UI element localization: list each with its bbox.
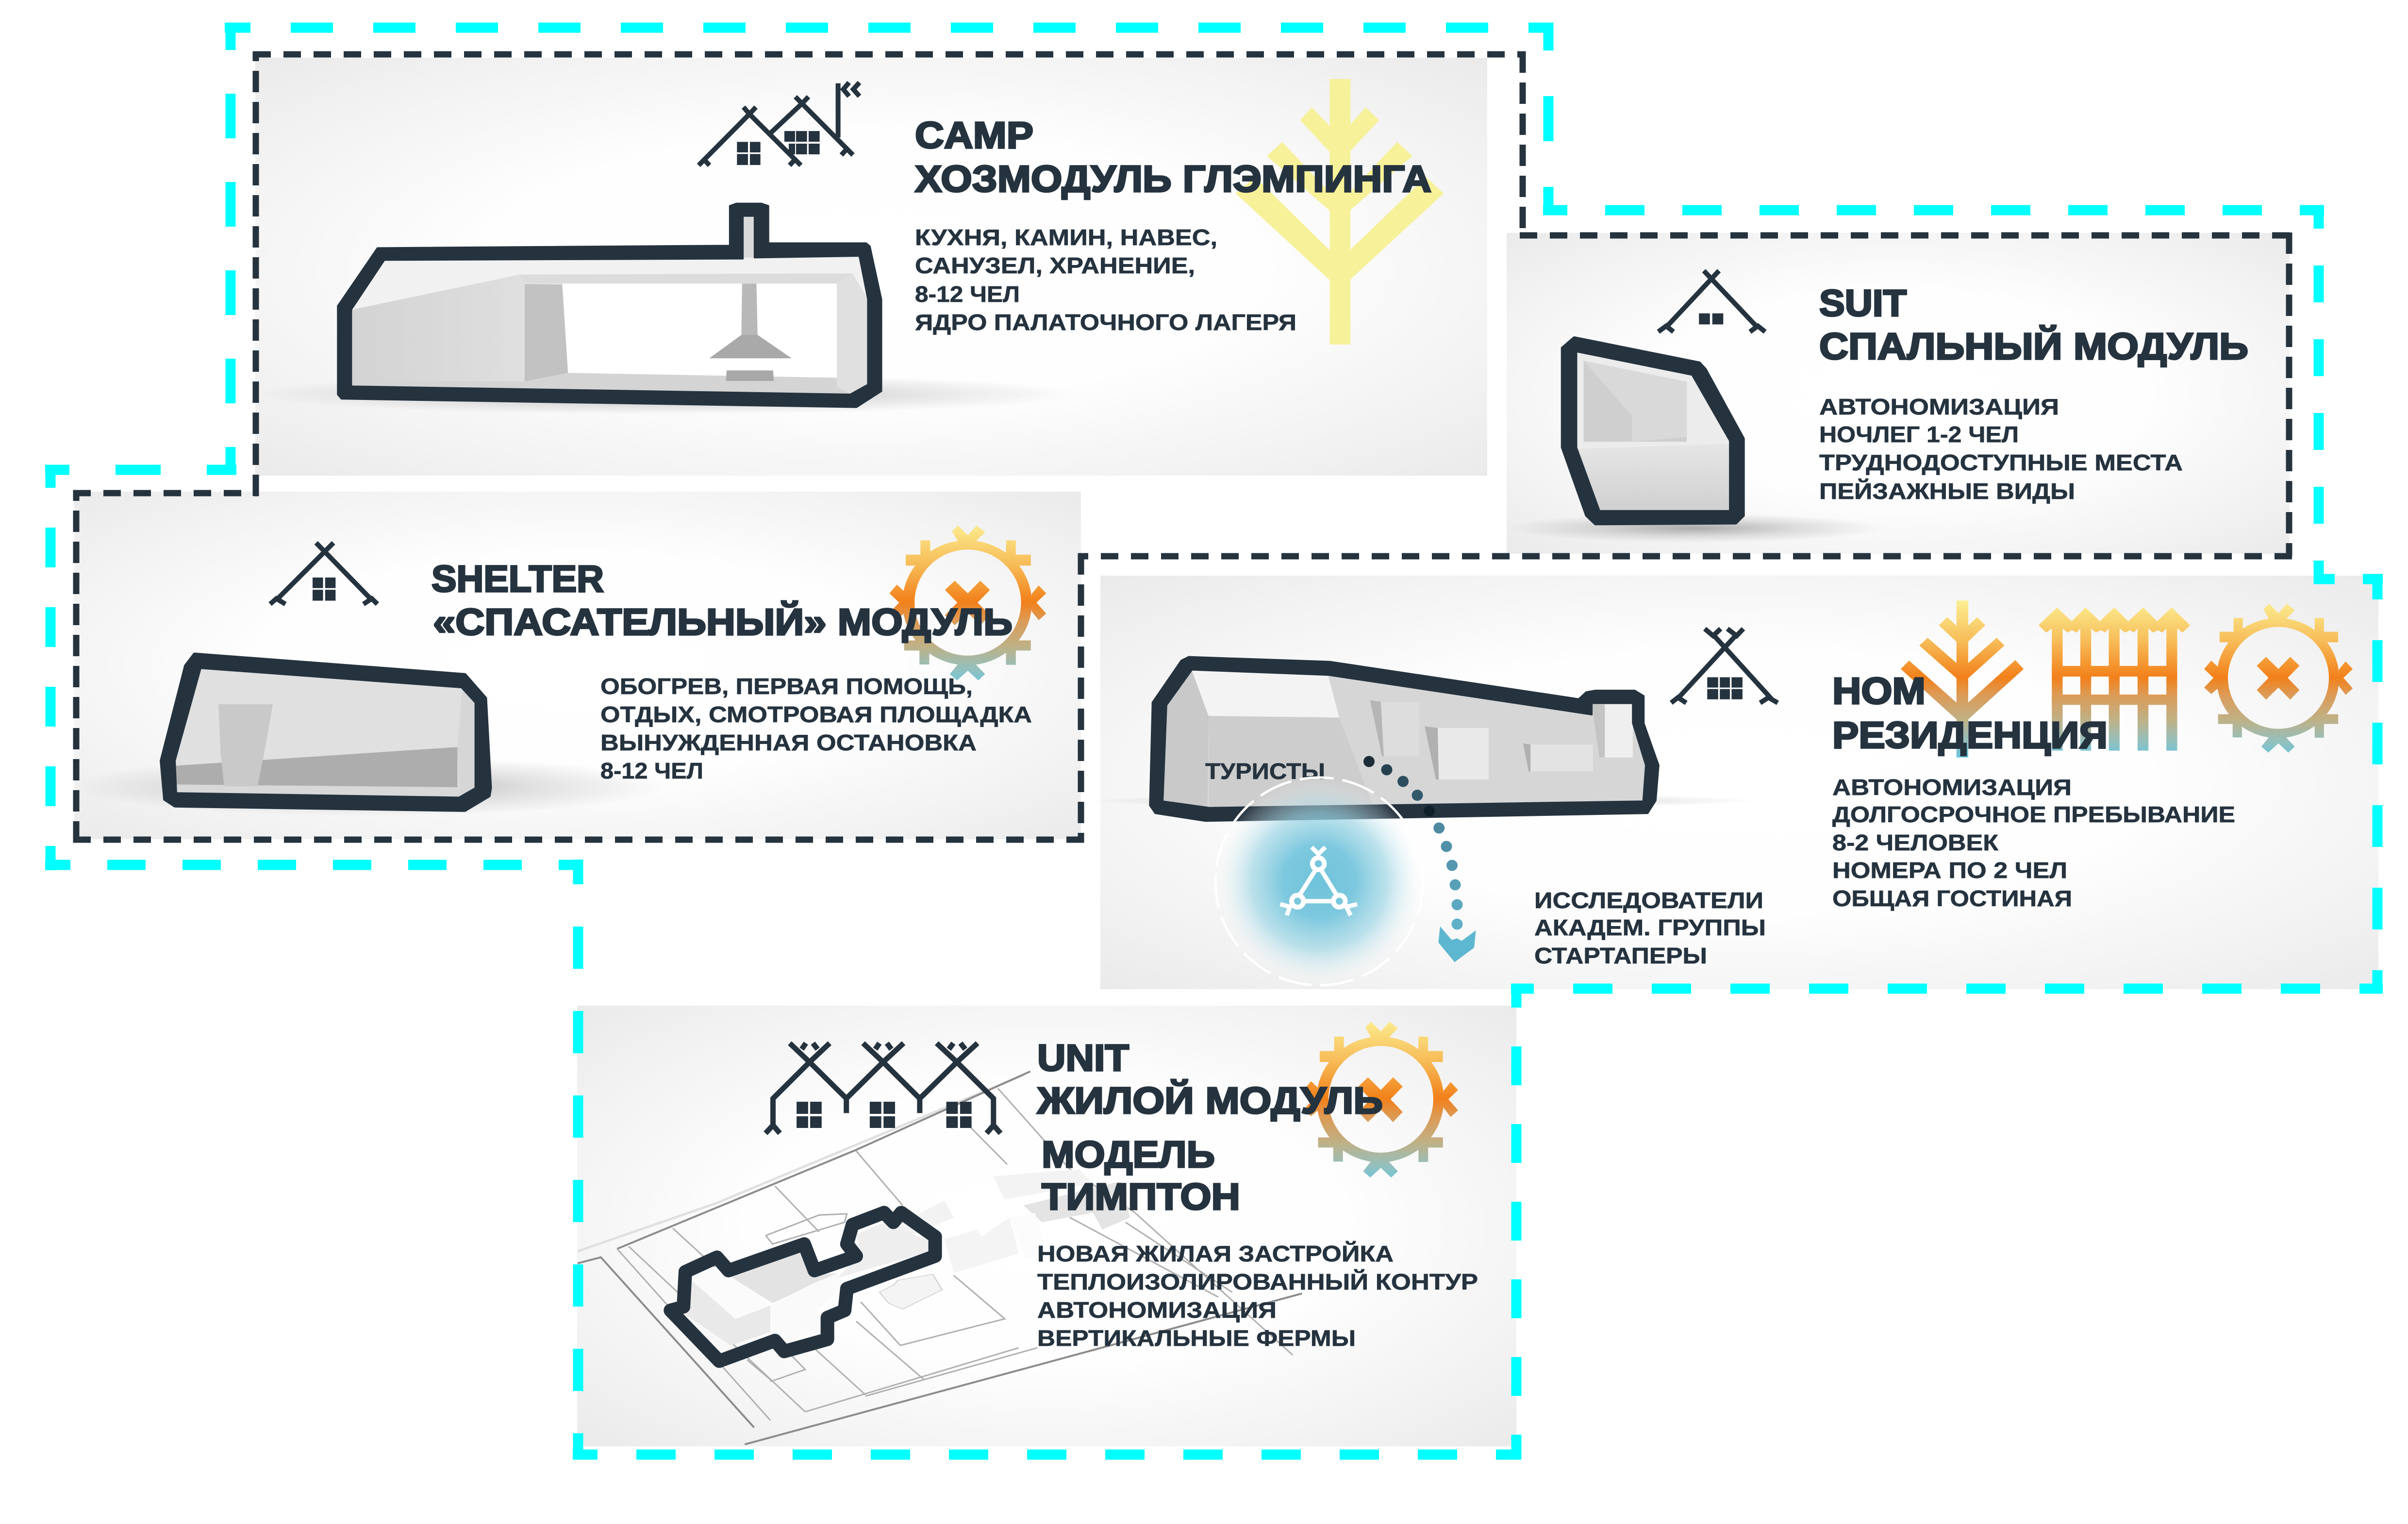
heading: suit: [1819, 282, 2248, 367]
heading: unit: ЖИЛОЙ МОДУЛЬ: [1037, 1079, 1383, 1122]
3D module: shelter: [162, 653, 490, 811]
text block: shelter: 8-12 ЧЕЛ: [600, 758, 703, 783]
heading: hom: НОМ: [1832, 670, 1926, 712]
text block: camp: ЯДРО ПАЛАТОЧНОГО ЛАГЕРЯ: [915, 310, 1296, 335]
heading: camp: [915, 115, 1431, 200]
ground shadow: suit: [1505, 514, 1883, 543]
text block: suit: АВТОНОМИЗАЦИЯ: [1819, 394, 2059, 419]
panel background: suit: [1507, 233, 2290, 554]
heading: shelter: «СПАСАТЕЛЬНЫЙ» МОДУЛЬ: [433, 600, 1013, 643]
3D module: hom: [1150, 656, 1659, 822]
heading: unit: [1037, 1037, 1383, 1122]
symbol: sun: [889, 526, 1046, 680]
symbols: tree, fence, sun: [1901, 600, 2353, 758]
icon: two houses with flag: [698, 83, 860, 166]
text block: shelter: ОТДЫХ, СМОТРОВАЯ ПЛОЩАДКА: [600, 702, 1032, 727]
heading: shelter: SHELTER: [432, 558, 604, 600]
module outline: camp: [338, 203, 881, 408]
text block: shelter: [600, 674, 1032, 783]
icon: three houses: [765, 1043, 1000, 1133]
panel: UNIT: [577, 1006, 1516, 1446]
heading: hom: РЕЗИДЕНЦИЯ: [1832, 714, 2108, 756]
text block: suit: [1819, 394, 2183, 504]
panel background: camp: [255, 58, 1487, 476]
text block: hom: [1832, 775, 2235, 911]
text block: hom: 8-2 ЧЕЛОВЕК: [1832, 830, 1999, 855]
text block: researchers: АКАДЕМ. ГРУППЫ: [1534, 915, 1766, 940]
panel: SHELTER: [73, 492, 1081, 839]
text block: shelter: ОБОГРЕВ, ПЕРВАЯ ПОМОЩЬ,: [600, 674, 973, 699]
text block: hom: АВТОНОМИЗАЦИЯ: [1832, 775, 2072, 800]
symbol: sun: [1304, 1022, 1458, 1177]
dashed outline: dark inner contour: [73, 51, 2292, 843]
arrow: dotted path: [1363, 756, 1476, 962]
heading: unit: UNIT: [1037, 1037, 1129, 1079]
module outline: suit: [1562, 337, 1744, 525]
text block: unit: ВЕРТИКАЛЬНЫЕ ФЕРМЫ: [1037, 1325, 1356, 1351]
text block: camp: 8-12 ЧЕЛ: [915, 282, 1020, 307]
icon: tent house: [1658, 271, 1765, 332]
text block: suit: ПЕЙЗАЖНЫЕ ВИДЫ: [1819, 479, 2075, 504]
heading: shelter: [432, 558, 1013, 643]
module outline: hom: [1150, 656, 1659, 822]
text block: hom: ОБЩАЯ ГОСТИНАЯ: [1832, 886, 2072, 911]
panel background: unit: [577, 1006, 1516, 1446]
text block: hom: ДОЛГОСРОЧНОЕ ПРЕБЫВАНИЕ: [1832, 802, 2235, 827]
text block: unit: [1037, 1241, 1478, 1351]
outline: building footprint: [670, 1212, 935, 1361]
heading: model: [1042, 1134, 1240, 1218]
text block: researchers: [1534, 888, 1766, 968]
heading: model: МОДЕЛЬ: [1042, 1134, 1215, 1176]
heading: suit: SUIT: [1819, 282, 1907, 324]
ground shadow: shelter: [73, 756, 665, 816]
ground shadow: camp: [252, 374, 1078, 414]
ground shadow: hom: [1087, 794, 1757, 808]
text block: camp: САНУЗЕЛ, ХРАНЕНИЕ,: [915, 253, 1195, 278]
3D module: camp: [338, 203, 881, 408]
icon: tent house: [270, 543, 377, 604]
heading: camp: ХОЗМОДУЛЬ ГЛЭМПИНГА: [915, 158, 1431, 200]
panel background: hom: [1100, 576, 2378, 989]
module outline: shelter: [162, 653, 490, 811]
text block: unit: АВТОНОМИЗАЦИЯ: [1037, 1297, 1277, 1323]
text block: unit: ТЕПЛОИЗОЛИРОВАННЫЙ КОНТУР: [1037, 1269, 1478, 1294]
text block: hom: НОМЕРА ПО 2 ЧЕЛ: [1832, 858, 2067, 883]
text block: camp: [915, 225, 1296, 335]
site plan: [578, 1071, 1302, 1444]
icon: tent house with branches: [1671, 629, 1778, 703]
panel: HOM: [1087, 576, 2378, 989]
heading: suit: СПАЛЬНЫЙ МОДУЛЬ: [1819, 325, 2248, 367]
text block: suit: НОЧЛЕГ 1-2 ЧЕЛ: [1819, 422, 2019, 447]
heading: model: ТИМПТОН: [1042, 1176, 1240, 1218]
symbol: yellow tree: [1235, 79, 1444, 345]
3D module: suit: [1562, 337, 1744, 525]
icon: white triangle: [1280, 847, 1357, 915]
panel background: shelter: [74, 492, 1081, 839]
heading: hom: [1832, 670, 2108, 756]
label: tourists: ТУРИСТЫ: [1205, 759, 1325, 784]
text block: suit: ТРУДНОДОСТУПНЫЕ МЕСТА: [1819, 450, 2183, 475]
circle: researchers zone: [1215, 778, 1423, 985]
text block: researchers: ИССЛЕДОВАТЕЛИ: [1534, 888, 1763, 913]
text block: researchers: СТАРТАПЕРЫ: [1534, 943, 1707, 968]
panel: SUIT: [1505, 233, 2290, 554]
text block: shelter: ВЫНУЖДЕННАЯ ОСТАНОВКА: [600, 730, 977, 755]
text block: camp: КУХНЯ, КАМИН, НАВЕС,: [915, 225, 1217, 250]
heading: camp: CAMP: [915, 115, 1033, 156]
text block: unit: НОВАЯ ЖИЛАЯ ЗАСТРОЙКА: [1037, 1241, 1394, 1266]
panel: CAMP: [252, 58, 1487, 476]
